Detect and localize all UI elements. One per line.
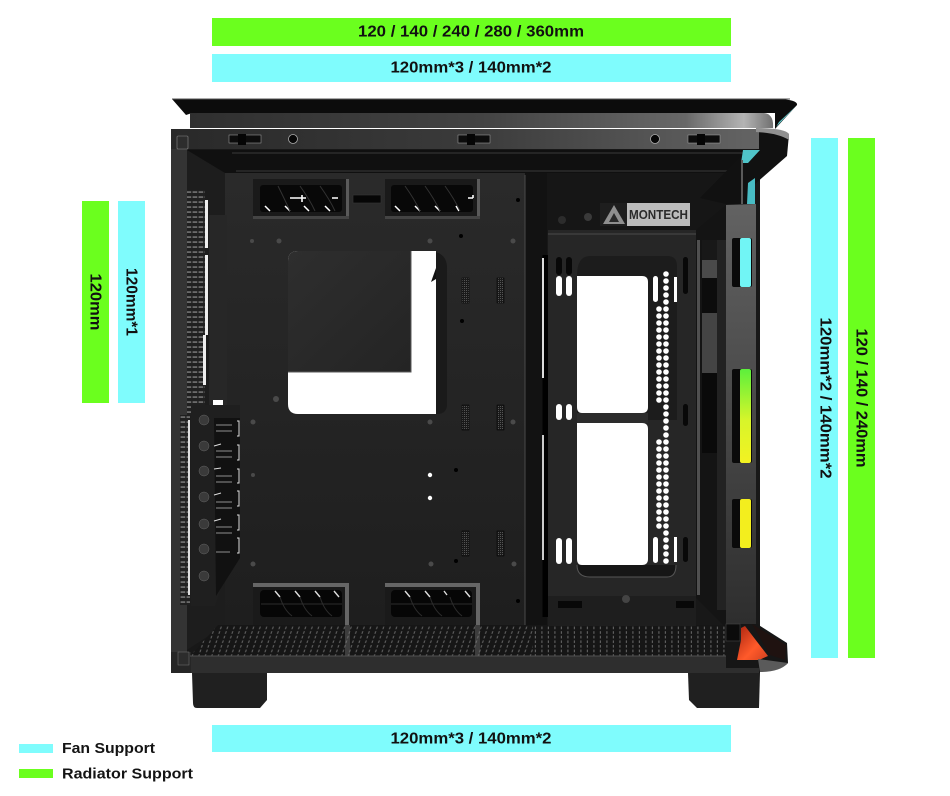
- legend: fan support: Fan Support: [62, 740, 155, 757]
- front fan support bar: [811, 138, 838, 658]
- perforated white dot strip: [656, 271, 669, 564]
- floor perforation: [190, 625, 737, 656]
- rear radiator support bar: 120mm: [86, 273, 104, 331]
- main chassis body: [171, 129, 760, 673]
- expansion slots: [191, 405, 240, 606]
- rear radiator support bar: [82, 201, 109, 403]
- top fan support bar: [212, 54, 731, 82]
- front fan support bar: 120mm*2 / 140mm*2: [816, 318, 834, 478]
- bottom fan support bar: 120mm*3 / 140mm*2: [390, 730, 552, 748]
- top radiator support bar: 120 / 140 / 240 / 280 / 360mm: [358, 24, 584, 40]
- bottom right corner with red glow: [726, 624, 788, 672]
- rear fan support bar: [118, 201, 145, 403]
- legend: [19, 740, 193, 782]
- front pillar with RGB slots: [726, 204, 756, 624]
- left rear perforated panel: [180, 190, 227, 605]
- top fan grilles: [253, 179, 480, 219]
- bottom fan support bar: [212, 725, 731, 752]
- rear fan support bar: 120mm*1: [122, 268, 140, 336]
- bottom fan grilles: [253, 583, 480, 625]
- top right corner with cyan glow: [700, 128, 789, 204]
- rear motherboard tray: [225, 173, 547, 627]
- front drive bay bracket: [547, 173, 727, 626]
- legend: radiator support: Radiator Support: [62, 766, 193, 782]
- case feet: [192, 673, 760, 708]
- MONTECH logo plate: [558, 203, 690, 226]
- front radiator support bar: [848, 138, 875, 658]
- motherboard cutout: [288, 251, 447, 414]
- front radiator support bar: 120 / 140 / 240mm: [852, 328, 870, 468]
- bottom frame band: [171, 652, 759, 673]
- front hinge section: [696, 205, 726, 628]
- top radiator support bar: [212, 18, 731, 46]
- chassis: case photo illustration: [171, 99, 797, 708]
- tray details: mounts and holes: [250, 198, 520, 603]
- MONTECH logo plate: MONTECH: [629, 208, 688, 222]
- legend: fan support: [19, 740, 155, 757]
- top frame band with brackets: [171, 129, 760, 149]
- top fan support bar: 120mm*3 / 140mm*2: [390, 60, 552, 76]
- top glass lid: [172, 99, 797, 129]
